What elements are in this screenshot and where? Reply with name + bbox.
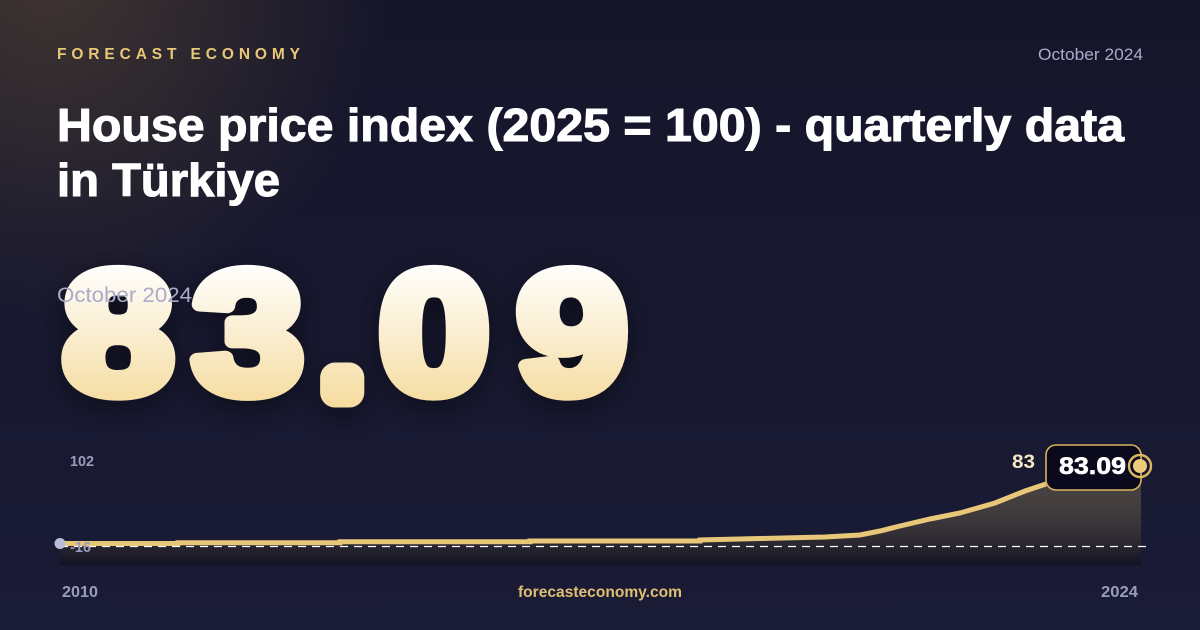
title: in Türkiye [57, 154, 280, 206]
source site: forecasteconomy.com [518, 584, 682, 601]
title: House price index (2025 = 100) - quarterly data [57, 99, 1124, 151]
axis label min: -16 [70, 540, 91, 556]
rounded value label: 83 [1012, 452, 1035, 473]
area fill [60, 466, 1141, 565]
zero dashed line [60, 546, 1147, 548]
big value: . [328, 302, 356, 414]
date top right: October 2024 [1038, 46, 1143, 64]
overlapping date label: October 2024 [57, 284, 192, 307]
title [57, 99, 1124, 206]
big value: 83 [63, 237, 303, 429]
end year: 2024 [1101, 584, 1138, 601]
big value: 09 [379, 237, 627, 429]
brand label: FORECAST ECONOMY [57, 46, 301, 63]
value badge [1046, 445, 1141, 490]
axis label max: 102 [70, 454, 94, 470]
big value [63, 237, 627, 429]
value badge: 83.09 [1059, 453, 1126, 480]
start year: 2010 [62, 584, 98, 601]
end marker [1129, 455, 1151, 477]
start dot [54, 538, 66, 549]
data line [60, 484, 1046, 544]
area chart [54, 445, 1151, 565]
